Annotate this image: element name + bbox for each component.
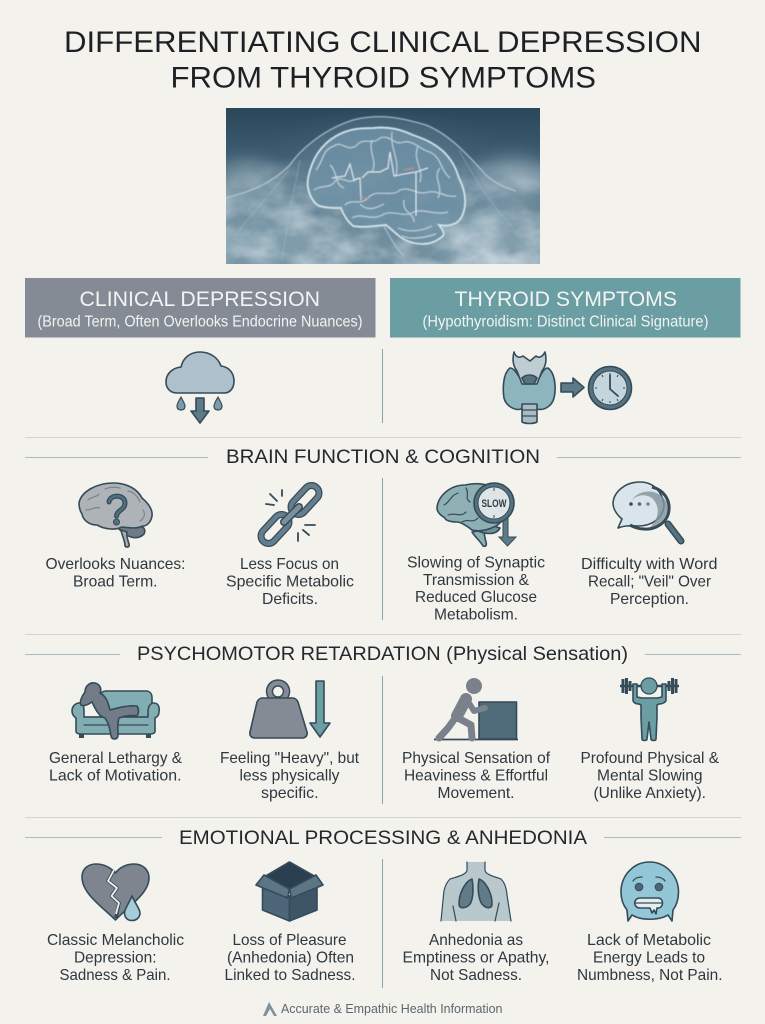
panel header: thyroid symptoms xyxy=(390,278,740,338)
text: brain function captions: Perception. xyxy=(610,591,689,608)
text: psychomotor captions: specific. xyxy=(261,785,318,802)
text: emotional captions: Emptiness or Apathy, xyxy=(402,950,550,966)
text: psychomotor captions: Heaviness & Effortful xyxy=(404,768,548,784)
footer with logo: Accurate & Empathic Health Information xyxy=(281,1001,502,1016)
brain illustration xyxy=(308,127,465,256)
section heading: emotional processing: EMOTIONAL PROCESSING & ANHEDONIA xyxy=(179,827,587,849)
icon: person pushing box xyxy=(434,678,518,740)
text: emotional captions: Classic Melancholic xyxy=(47,932,184,949)
text: emotional captions xyxy=(47,932,722,984)
text: psychomotor captions: Lack of Motivation. xyxy=(49,768,182,784)
icon: person slumped on sofa xyxy=(72,683,159,739)
text: emotional captions: Depression: xyxy=(74,950,156,966)
icon: speech bubble under magnifier xyxy=(613,482,681,541)
text: psychomotor captions: Mental Slowing xyxy=(597,768,702,784)
text: brain function captions: Slowing of Synaptic xyxy=(407,554,545,572)
text: emotional captions: Anhedonia as xyxy=(429,932,523,949)
text: brain function captions: Reduced Glucose xyxy=(415,589,537,606)
section heading: brain function: BRAIN FUNCTION & COGNITION xyxy=(226,446,540,468)
text: emotional captions: Energy Leads to xyxy=(593,950,705,966)
text: brain function captions: Deficits. xyxy=(262,591,318,608)
icon: thyroid gland, arrow and clock xyxy=(503,352,632,424)
icon: broken chain link xyxy=(258,482,322,547)
icon: heavy weight with arrow xyxy=(250,680,330,738)
text: emotional captions: Linked to Sadness. xyxy=(224,967,356,984)
text: emotional captions: Sadness & Pain. xyxy=(60,967,170,984)
title: DIFFERENTIATING CLINICAL DEPRESSION xyxy=(64,26,702,59)
text: psychomotor captions xyxy=(49,750,719,802)
text: brain function captions: Transmission & xyxy=(423,572,529,589)
panel header: clinical depression xyxy=(25,278,376,338)
icon: person lifting barbell xyxy=(620,678,679,740)
text: psychomotor captions: Profound Physical & xyxy=(580,750,719,767)
panel header: clinical depression: CLINICAL DEPRESSION xyxy=(80,288,320,311)
text: emotional captions: Not Sadness. xyxy=(430,967,522,984)
panel header: clinical depression: (Broad Term, Often Overlooks Endocrine Nuances) xyxy=(38,314,362,330)
text: psychomotor captions: Movement. xyxy=(438,785,514,802)
icon: frozen numb face xyxy=(621,862,678,921)
panel header: thyroid symptoms: THYROID SYMPTOMS xyxy=(454,288,677,311)
text: psychomotor captions: less physically xyxy=(240,768,340,784)
text: brain function captions: Less Focus on xyxy=(240,556,339,573)
icon: rain cloud with down arrow xyxy=(166,352,234,423)
icon: broken heart with teardrop xyxy=(82,864,149,920)
text: brain function captions: Broad Term. xyxy=(73,574,158,590)
icon: brain with slow gauge xyxy=(437,483,516,546)
text: emotional captions: Numbness, Not Pain. xyxy=(577,967,722,984)
title: FROM THYROID SYMPTOMS xyxy=(170,62,596,94)
text: brain function captions: Specific Metabolic xyxy=(226,574,354,590)
hero image: brain in fog xyxy=(226,108,540,264)
text: emotional captions: Loss of Pleasure xyxy=(232,932,347,949)
text: psychomotor captions: (Unlike Anxiety). xyxy=(594,785,706,802)
text: emotional captions: (Anhedonia) Often xyxy=(227,950,354,966)
section heading: psychomotor: PSYCHOMOTOR RETARDATION (Physical Sensation) xyxy=(137,643,628,665)
text: brain function captions xyxy=(46,554,718,624)
text: brain function captions: Overlooks Nuances: xyxy=(46,556,186,573)
text: brain function captions: Difficulty with Word xyxy=(581,556,718,573)
text: psychomotor captions: Feeling "Heavy", but xyxy=(220,750,360,767)
icon: empty open box xyxy=(256,862,323,921)
icon: brain with question mark xyxy=(79,483,152,547)
icon: torso with lungs xyxy=(441,862,511,921)
title xyxy=(64,26,702,94)
text: psychomotor captions: General Lethargy & xyxy=(49,750,182,767)
icon: brain with slow gauge: SLOW xyxy=(482,498,507,510)
panel header: thyroid symptoms: (Hypothyroidism: Distinct Clinical Signature) xyxy=(422,314,708,330)
text: brain function captions: Metabolism. xyxy=(434,606,518,624)
text: psychomotor captions: Physical Sensation of xyxy=(402,750,551,767)
text: emotional captions: Lack of Metabolic xyxy=(587,932,711,949)
text: brain function captions: Recall; "Veil" Over xyxy=(588,574,712,590)
